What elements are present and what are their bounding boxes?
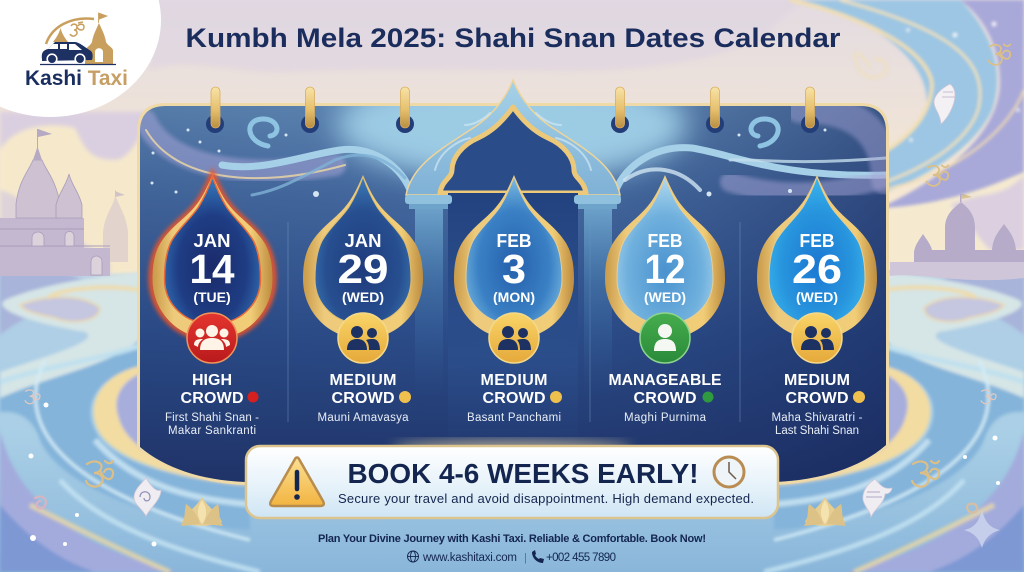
- callout: book early banner: [246, 441, 778, 518]
- occasion: Maghi Purnima: [624, 412, 707, 424]
- footer contact: [408, 550, 616, 564]
- drop: [757, 175, 877, 339]
- right sky swirl: [690, 0, 1024, 208]
- occasion: [772, 412, 863, 437]
- left river: [0, 262, 260, 572]
- title: Kumbh Mela 2025: Shahi Snan Dates Calendar: [186, 23, 841, 53]
- right river: [764, 262, 1024, 572]
- date: [792, 231, 842, 305]
- sky clouds: [0, 0, 1024, 275]
- occasion: Maha Shivaratri -: [772, 412, 863, 424]
- crowd label: CROWD: [634, 390, 696, 407]
- drop: [152, 175, 272, 339]
- occasion: Last Shahi Snan: [775, 425, 859, 437]
- date: [493, 231, 535, 305]
- footer tagline: Plan Your Divine Journey with Kashi Taxi. Reliable & Comfortable. Book Now!: [318, 533, 706, 545]
- column: Feb 12: [605, 175, 725, 424]
- icon: sparkle: [964, 510, 1000, 548]
- icon: conch shell left: [134, 478, 161, 516]
- footer contact: |: [524, 552, 527, 564]
- icon: conch shell right: [863, 479, 892, 517]
- top swirls: [140, 106, 886, 197]
- calendar rings: [206, 87, 819, 133]
- footer contact: www.kashitaxi.com: [422, 552, 517, 564]
- date: (WED): [796, 289, 838, 305]
- icon: warning triangle: [270, 458, 324, 506]
- date: 14: [190, 246, 235, 292]
- date: [644, 231, 686, 305]
- panel: calendar: [137, 70, 889, 485]
- occasion: Mauni Amavasya: [318, 412, 409, 424]
- crowd label: [180, 372, 258, 407]
- icon: conch shell top right: [934, 84, 955, 124]
- right temple silhouette: [890, 193, 1024, 280]
- occasion: First Shahi Snan -: [165, 412, 259, 424]
- date: (TUE): [193, 289, 231, 305]
- date: FEB: [648, 231, 683, 251]
- date: 12: [644, 246, 686, 292]
- callout heading: BOOK 4-6 WEEKS EARLY!: [348, 458, 698, 489]
- date: JAN: [344, 231, 382, 251]
- date: JAN: [194, 231, 230, 251]
- date: (WED): [342, 289, 384, 305]
- footer contact: +002 455 7890: [546, 552, 616, 564]
- occasion: Makar Sankranti: [168, 425, 256, 437]
- logo badge: [0, 0, 161, 117]
- crowd label: [480, 372, 562, 407]
- crowd label: MEDIUM: [480, 372, 548, 389]
- drop: [605, 175, 725, 339]
- crowd label: [784, 372, 865, 407]
- column: Jan 29: [303, 175, 423, 424]
- crowd label: MEDIUM: [330, 372, 396, 389]
- icon: phone: [532, 550, 544, 563]
- crowd label: CROWD: [482, 390, 546, 407]
- crowd label: MANAGEABLE: [608, 372, 722, 389]
- icon: high crowd: [187, 313, 237, 363]
- icon: manageable crowd: [640, 313, 690, 363]
- left temple silhouette: [0, 129, 128, 276]
- crowd label: [330, 372, 411, 407]
- date: [190, 231, 235, 305]
- column: Feb 26: [757, 175, 877, 437]
- crowd label: HIGH: [192, 372, 232, 389]
- crowd label: [608, 372, 722, 407]
- date: [338, 231, 388, 305]
- date: (WED): [644, 289, 686, 305]
- occasion: Basant Panchami: [467, 412, 561, 424]
- crowd label: CROWD: [332, 390, 394, 407]
- column: Feb 3: [454, 175, 574, 424]
- center arch with columns: [405, 80, 621, 463]
- icon: globe: [408, 551, 418, 562]
- icon: medium crowd: [338, 313, 388, 363]
- occasion: [165, 412, 259, 437]
- icon: lotus left: [181, 497, 223, 526]
- logo wordmark: Kashi Taxi: [25, 67, 128, 90]
- icon: lotus right: [804, 497, 846, 526]
- sparkle dots: [28, 402, 1000, 546]
- date: 26: [792, 246, 842, 292]
- date: FEB: [800, 231, 835, 251]
- decorative om symbols: [25, 44, 1010, 513]
- icon: medium crowd: [489, 313, 539, 363]
- crowd label: CROWD: [180, 390, 244, 407]
- date: (MON): [493, 289, 535, 305]
- icon: clock: [714, 457, 744, 487]
- column: Jan 14: [152, 175, 274, 437]
- date: 3: [502, 246, 526, 292]
- dividers: [288, 222, 740, 422]
- drop: [454, 175, 574, 339]
- date: 29: [338, 246, 388, 292]
- icon: medium crowd: [792, 313, 842, 363]
- crowd label: CROWD: [786, 390, 848, 407]
- drop: [303, 175, 423, 339]
- icon: temple and car logo: [40, 13, 116, 64]
- crowd label: MEDIUM: [784, 372, 850, 389]
- date: FEB: [496, 231, 532, 251]
- callout subtext: Secure your travel and avoid disappointment. High demand expected.: [338, 491, 754, 506]
